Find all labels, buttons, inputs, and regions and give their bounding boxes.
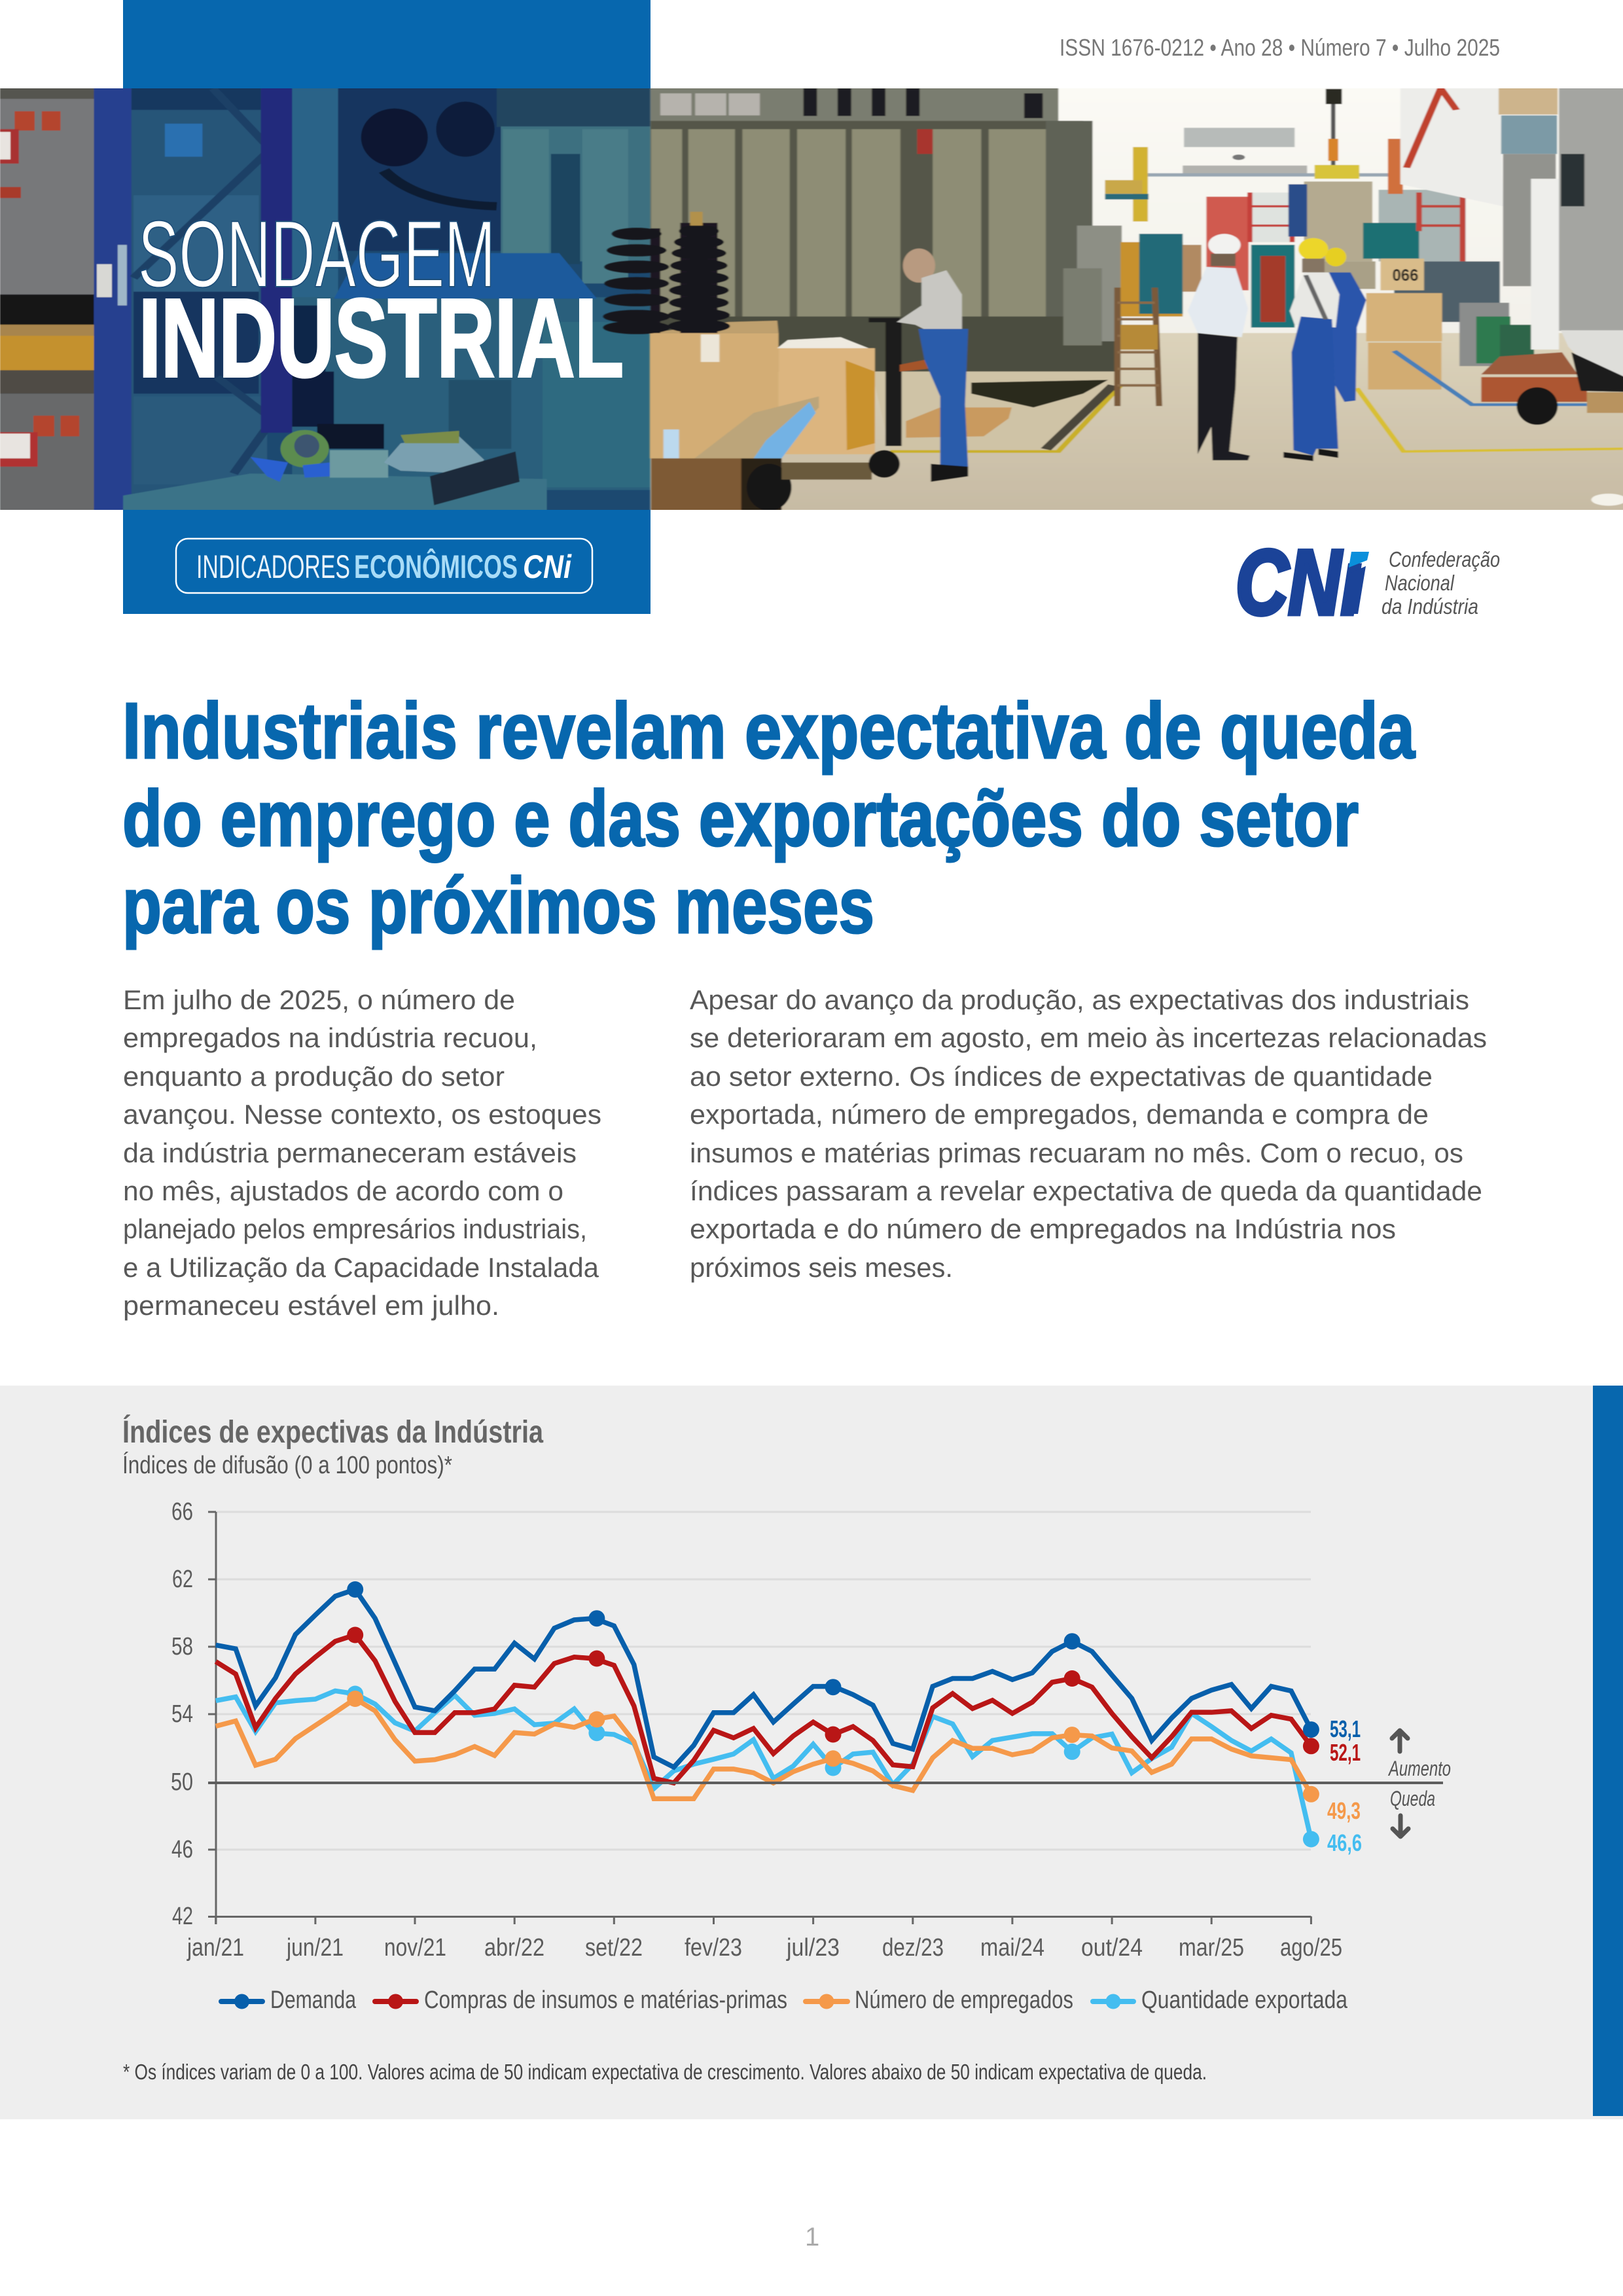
text block: left column: avançou. Nesse contexto, os estoques	[123, 1099, 601, 1130]
logo: CNI: da Indústria	[1382, 594, 1478, 619]
text block: left column: Em julho de 2025, o número de	[123, 984, 515, 1015]
y axis: 42	[172, 1903, 193, 1930]
y axis	[171, 1498, 1311, 1930]
x axis: dez/23	[882, 1934, 944, 1962]
markers: empregados	[347, 1691, 1319, 1803]
x axis: mai/24	[980, 1934, 1044, 1962]
y axis: 62	[172, 1566, 193, 1593]
tab under the photo with series pill	[123, 510, 651, 614]
text block: right column: ao setor externo. Os índices de expectativas de quantidade	[690, 1061, 1433, 1092]
text block: right column: próximos seis meses.	[690, 1252, 953, 1283]
series: Compras de insumos e matérias-primas	[216, 1635, 1311, 1783]
text block: right column: insumos e matérias primas recuaram no mês. Com o recuo, os	[690, 1138, 1463, 1168]
legend item: Empregados: Número de empregados	[855, 1986, 1073, 2014]
pill: Indicadores Econômicos CNI	[176, 539, 592, 593]
text block: left column	[123, 984, 601, 1321]
series: Quantidade exportada	[216, 1691, 1311, 1839]
value labels: 49,3	[1327, 1797, 1361, 1824]
y axis: 58	[171, 1633, 193, 1660]
label: queda: Queda	[1390, 1787, 1435, 1810]
text block: right column: se deterioraram em agosto, em meio às incertezas relacionadas	[690, 1022, 1487, 1053]
worker with blue coat behind	[1325, 247, 1366, 402]
y axis: 50	[171, 1768, 193, 1796]
logo: CNI: Confederação	[1389, 547, 1500, 571]
x axis: jul/23	[786, 1934, 840, 1962]
y axis: 54	[171, 1700, 193, 1728]
text block: left column: enquanto a produção do setor	[123, 1061, 505, 1092]
y axis: 46	[171, 1836, 193, 1863]
worker with white helmet	[1188, 234, 1250, 460]
legend item: Demanda: Demanda	[270, 1986, 357, 2014]
worker with yellow helmet	[1283, 238, 1340, 461]
x axis: nov/21	[384, 1934, 446, 1962]
pill: Indicadores Econômicos CNI: INDICADORES	[196, 548, 350, 585]
x axis: abr/22	[484, 1934, 544, 1962]
photo left part: blue-tinted shelving	[0, 85, 654, 518]
issue line: ISSN 1676-0212 • Ano 28 • Número 7 • Julho 2025	[1060, 34, 1500, 61]
text block: left column: da indústria permaneceram estáveis	[123, 1138, 577, 1168]
x axis: fev/23	[685, 1934, 742, 1962]
x axis: jan/21	[187, 1934, 244, 1962]
x axis: jun/21	[286, 1934, 344, 1962]
text block: right column: Apesar do avanço da produção, as expectativas dos industriais	[690, 984, 1469, 1015]
series: Número de empregados	[216, 1699, 1311, 1799]
arrow: aumento	[1392, 1731, 1408, 1751]
text block: left column: empregados na indústria recuou,	[123, 1022, 537, 1053]
logo: CNI: Nacional	[1385, 571, 1455, 595]
x axis: out/24	[1081, 1934, 1143, 1962]
chart subheading: Índices de difusão (0 a 100 pontos)*	[122, 1451, 452, 1479]
legend item: Exportada: Quantidade exportada	[1141, 1986, 1348, 2014]
text block: left column: permaneceu estável em julho.	[123, 1290, 499, 1321]
headline	[122, 686, 1416, 950]
pill: Indicadores Econômicos CNI: ECONÔMICOS	[354, 548, 518, 585]
worker with pallet truck	[897, 249, 968, 482]
value labels	[1327, 1715, 1362, 1856]
arrow: queda	[1393, 1816, 1408, 1837]
footnote: * Os índices variam de 0 a 100. Valores acima de 50 indicam expectativa de crescimento. Valores abaixo de 50 indicam expectativa de queda.	[123, 2060, 1207, 2084]
page number: 1	[805, 2223, 819, 2251]
photo right part: transformers and workers: 066	[1392, 267, 1418, 285]
photo right part: transformers and workers	[603, 85, 1623, 517]
value labels: 52,1	[1330, 1739, 1361, 1766]
text block: right column: índices passaram a revelar expectativa de queda da quantidade	[690, 1175, 1482, 1206]
line chart	[171, 1498, 1451, 1962]
title overlay: Sondagem Industrial: INDUSTRIAL	[139, 276, 624, 401]
photo: factory floor	[0, 85, 1623, 518]
title overlay: Sondagem Industrial	[138, 201, 624, 401]
x axis: mar/25	[1179, 1934, 1244, 1962]
value labels: 53,1	[1330, 1715, 1361, 1742]
x axis: ago/25	[1280, 1934, 1342, 1962]
text block: right column: exportada e do número de empregados na Indústria nos	[690, 1213, 1396, 1244]
text block: left column: no mês, ajustados de acordo com o	[123, 1175, 563, 1206]
logo: CNI: CNı	[1236, 531, 1361, 634]
header band: blue tab	[123, 0, 651, 88]
headline: do emprego e das exportações do setor	[122, 774, 1359, 863]
axis line at 50	[208, 1782, 1443, 1784]
headline: Industriais revelam expectativa de queda	[122, 686, 1416, 775]
title overlay: Sondagem Industrial: SONDAGEM	[138, 201, 495, 307]
legend item: Empregados	[806, 1986, 1073, 2014]
insulators	[603, 223, 730, 334]
chart heading: Índices de expectivas da Indústria	[122, 1414, 543, 1450]
logo: CNI	[1236, 531, 1500, 634]
x axis	[187, 1916, 1342, 1962]
x axis: set/22	[585, 1934, 643, 1962]
text block: left column: planejado pelos empresários industriais,	[123, 1213, 587, 1244]
pill: Indicadores Econômicos CNI: CNi	[523, 548, 572, 585]
side accent bar	[1593, 1386, 1623, 2116]
legend	[221, 1986, 1348, 2014]
markers: demanda	[347, 1581, 1319, 1738]
panel: chart section	[0, 1386, 1623, 2119]
markers: exportada	[347, 1686, 1319, 1847]
text block: right column	[690, 984, 1487, 1283]
markers: compras	[347, 1627, 1319, 1754]
series: Demanda	[216, 1589, 1311, 1767]
label: aumento: Aumento	[1388, 1757, 1451, 1780]
text block: right column: exportada, número de empregados, demanda e compra de	[690, 1099, 1429, 1130]
legend item: Demanda	[221, 1986, 357, 2014]
y axis: 66	[171, 1498, 193, 1526]
legend item: Compras: Compras de insumos e matérias-primas	[424, 1986, 787, 2014]
text block: left column: e a Utilização da Capacidade Instalada	[123, 1252, 599, 1283]
headline: para os próximos meses	[122, 861, 874, 950]
value labels: 46,6	[1327, 1829, 1362, 1856]
